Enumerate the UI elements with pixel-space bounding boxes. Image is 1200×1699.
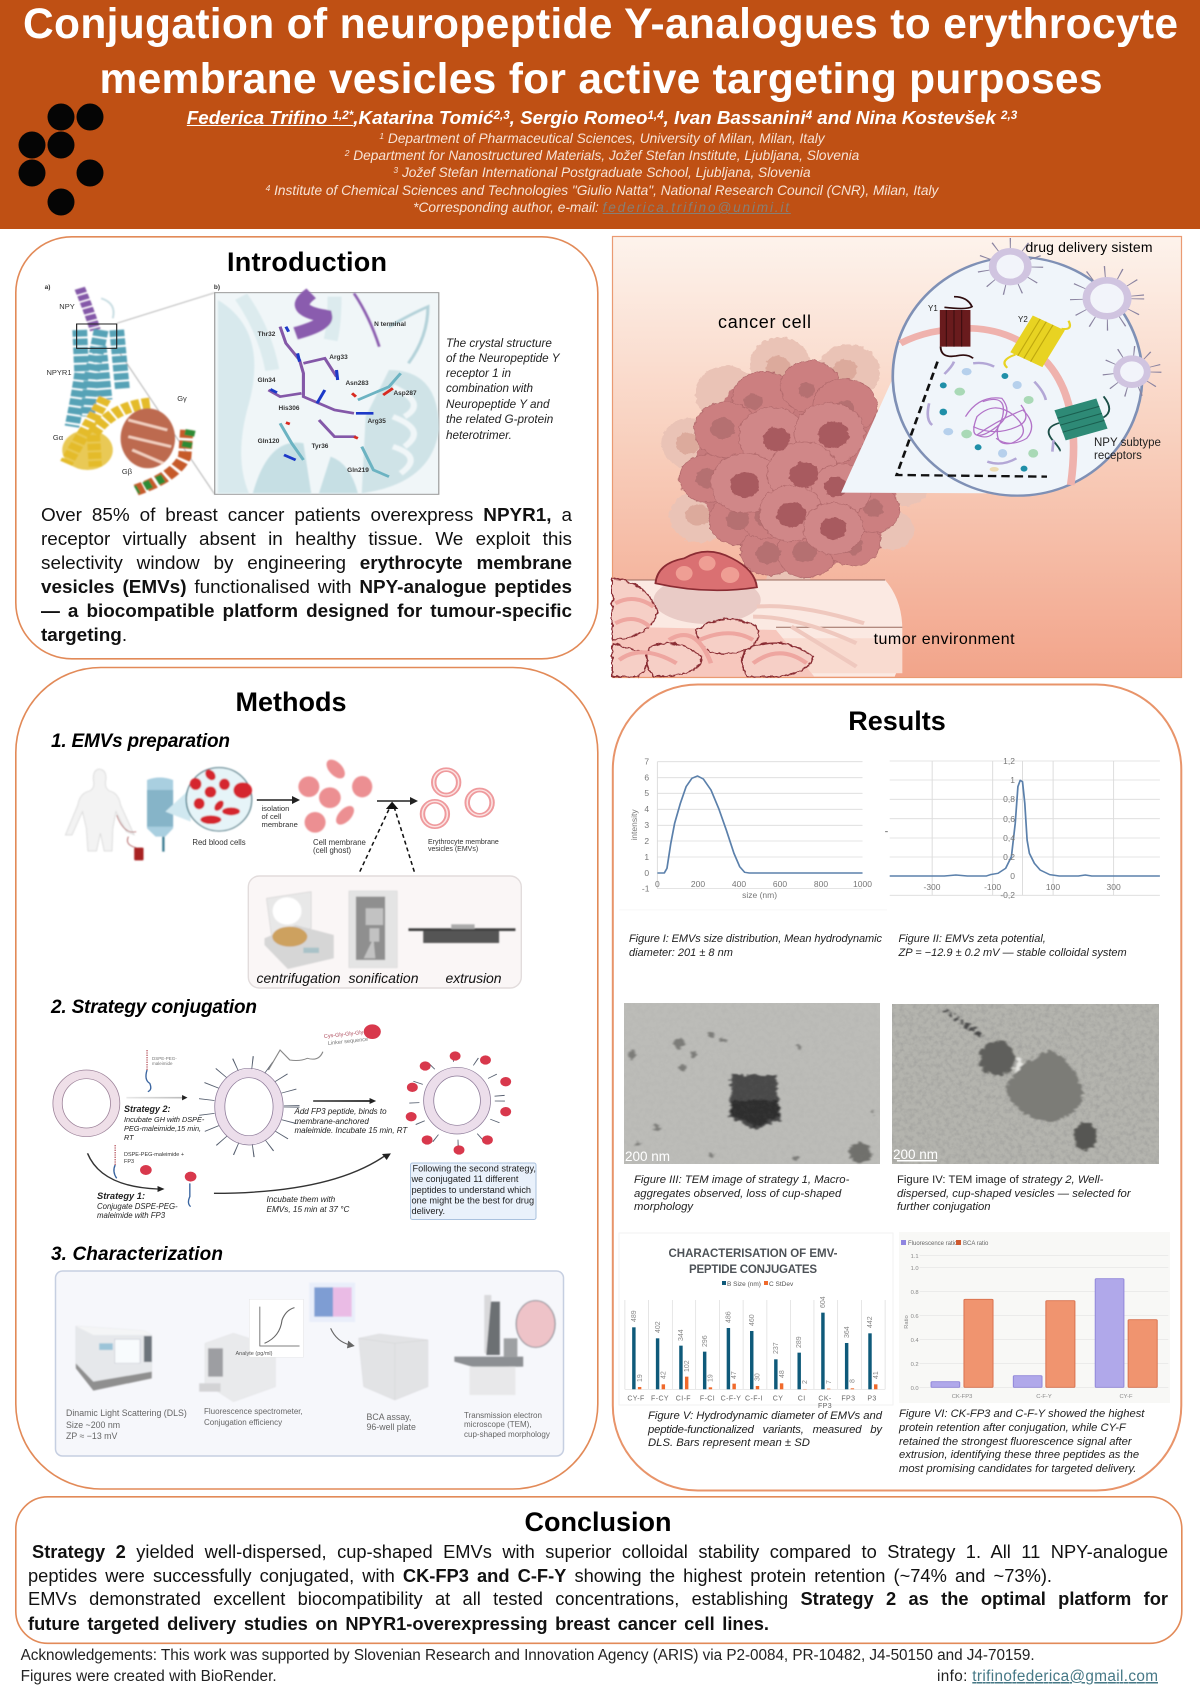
- text: DLS: ZP ≈ −13 mV: [66, 1431, 117, 1441]
- structure labels: Gln34: [257, 377, 276, 384]
- caption: figure I: Figure I: EMVs size distribution, Mean hydrodynamic: [629, 933, 882, 945]
- icon: organelles: [928, 362, 1053, 472]
- chart: hydrodynamic diameter bars: FP3: [841, 1396, 855, 1402]
- intro body text: vesicles (EMVs) functionalised with NPY-analogue peptides: [41, 577, 572, 598]
- structure labels: Asn283: [345, 380, 369, 387]
- caption: figure III: morphology: [634, 1201, 694, 1213]
- icon: maleimide-decorated EMV: [206, 1050, 323, 1151]
- acknowledgements: Figures were created with BioRender.: [21, 1668, 277, 1685]
- chart: zeta potential: 0,6: [1003, 814, 1015, 824]
- text: TEM: microscope (TEM),: [464, 1420, 532, 1429]
- chart: size distribution: 6: [644, 772, 649, 782]
- chart: size distribution: 1000: [853, 879, 872, 889]
- icon: 96-well plate: [309, 1283, 355, 1322]
- chart: size distribution: 200: [691, 879, 705, 889]
- arrow: to vesicles: [377, 797, 418, 805]
- diagram: blood donor and bag: [65, 769, 191, 860]
- icon: peptide-decorated EMV: [406, 1051, 511, 1155]
- arrows: reaction steps: [88, 1095, 391, 1193]
- authors: Federica Trifino 1,2*,Katarina Tomić2,3, Sergio Romeo1,4, Ivan Bassanini4 and Nina Kostevšek 2,3: [187, 107, 1017, 128]
- title: [23, 1, 1178, 103]
- chart: zeta potential: [885, 756, 1160, 900]
- image: TEM strategy 1: 200 nm: [625, 1149, 670, 1164]
- structure labels: b): [214, 284, 220, 291]
- caption: figure VI: most promising candidates for targeted delivery.: [899, 1463, 1136, 1475]
- caption: figure V: peptide-functionalized variants, measured by: [647, 1424, 883, 1436]
- heading: Results: Results: [848, 706, 946, 736]
- text: Strategy 1: Conjugate DSPE-PEG-: [97, 1202, 178, 1211]
- figure caption: crystal structure: Neuropeptide Y and: [446, 398, 550, 411]
- chart: hydrodynamic diameter bars: C-F-Y: [721, 1396, 741, 1402]
- chart: hydrodynamic diameter bars: 402: [655, 1321, 662, 1333]
- affiliation 1: 1 Department of Pharmaceutical Sciences, University of Milan, Milan, Italy: [379, 131, 825, 146]
- chart: hydrodynamic diameter bars: C-F-I: [745, 1396, 763, 1402]
- chart: size distribution: 0: [655, 879, 660, 889]
- chart: size distribution: -1: [642, 884, 650, 894]
- chart: fluorescence and BCA ratios: 0.0: [911, 1386, 919, 1392]
- text: DLS: Dinamic Light Scattering (DLS): [66, 1408, 187, 1418]
- figure: binding site close-up: [215, 293, 439, 494]
- chart: size distribution: 5: [644, 788, 649, 798]
- text: Strategy 1: Strategy 1:: [97, 1191, 145, 1201]
- text: EMV label: Erythrocyte membrane: [428, 839, 499, 846]
- chart: zeta potential: 1,2: [1003, 756, 1015, 766]
- chart: hydrodynamic diameter bars: CI: [798, 1396, 806, 1402]
- heading: Conclusion: Conclusion: [524, 1507, 672, 1537]
- figure caption: crystal structure: the related G-protein: [446, 413, 553, 426]
- structure labels: Gln219: [347, 467, 369, 474]
- intro body text: — a biocompatible platform designed for tumour-specific: [41, 601, 572, 622]
- title: Conjugation of neuropeptide Y-analogues to erythrocyte: [23, 1, 1178, 48]
- icon: dashed zoom triangle: [897, 362, 1047, 477]
- chart: fluorescence and BCA ratios: [899, 1232, 1170, 1403]
- figure caption: crystal structure: combination with: [446, 382, 533, 395]
- affiliation 2: 2 Department for Nanostructured Materials, Jožef Stefan Institute, Ljubljana, Slovenia: [345, 148, 859, 163]
- intro body text: [41, 505, 572, 646]
- heading: Introduction: Introduction: [227, 247, 387, 277]
- caption: figure VI: Figure VI: CK-FP3 and C-F-Y showed the highest: [899, 1408, 1145, 1420]
- chart: size distribution: 4: [644, 804, 649, 814]
- caption: figure V: DLS. Bars represent mean ± SD: [648, 1437, 810, 1449]
- chart: size distribution: 0: [644, 868, 649, 878]
- labels: receptor types: Y2: [1018, 315, 1028, 324]
- chart: zeta potential: -0,2: [1000, 890, 1015, 900]
- chart: fluorescence and BCA ratios: C-F-Y: [1036, 1394, 1052, 1400]
- image: TEM strategy 1: [624, 1003, 880, 1164]
- chart: size distribution: 1: [644, 852, 649, 862]
- text: incubate with EMVs: EMVs, 15 min at 37 °C: [266, 1205, 349, 1214]
- chart: hydrodynamic diameter bars: B Size (nm): [727, 1281, 761, 1288]
- image: TEM strategy 2: [892, 1004, 1159, 1164]
- chart: hydrodynamic diameter bars: 8: [850, 1379, 856, 1383]
- chart: hydrodynamic diameter bars: 486: [726, 1311, 732, 1323]
- caption: figure I: diameter: 201 ± 8 nm: [629, 947, 733, 959]
- contact email: info: trifinofederica@gmail.com: [937, 1668, 1158, 1685]
- caption: figure V: Figure V: Hydrodynamic diameter of EMVs and: [648, 1410, 883, 1422]
- chart: hydrodynamic diameter bars: 460: [749, 1314, 756, 1326]
- text: isolation of cell membrane: of cell: [262, 812, 282, 821]
- icon: nucleus DNA tangle: [965, 398, 1032, 444]
- text: red blood cells label: Red blood cells: [192, 838, 246, 847]
- chart: hydrodynamic diameter bars: 47: [731, 1371, 738, 1379]
- text: isolation of cell membrane: isolation: [262, 804, 289, 813]
- structure labels: Arg33: [329, 354, 348, 361]
- chart: hydrodynamic diameter bars: 237: [773, 1342, 780, 1354]
- structure labels: Gα: [53, 433, 64, 442]
- labels: receptor types: Y1: [928, 304, 938, 313]
- icon: extruder: [408, 924, 515, 943]
- icon: Y2 receptor: [1002, 307, 1072, 381]
- chart: fluorescence and BCA ratios: 0.2: [911, 1362, 919, 1368]
- chart: hydrodynamic diameter bars: CHARACTERISATION OF EMV-: [668, 1248, 838, 1260]
- structure labels: [45, 284, 417, 476]
- chart: hydrodynamic diameter bars: 296: [702, 1335, 709, 1347]
- chart: zeta potential: -300: [923, 882, 941, 892]
- callout: eleven peptides: one might be the best for drug: [412, 1196, 534, 1206]
- text: linker sequence: maleimide: [152, 1061, 173, 1066]
- chart: hydrodynamic diameter bars: FP3: [818, 1403, 832, 1410]
- chart: hydrodynamic diameter bars: 7: [826, 1380, 833, 1384]
- callout: eleven peptides: peptides to understand which: [412, 1185, 531, 1195]
- illustration: tumour cell cluster: [661, 337, 928, 603]
- chart: fluorescence and BCA ratios: BCA ratio: [963, 1241, 989, 1247]
- chart: zeta potential: 1: [1010, 775, 1015, 785]
- conclusion body text: future targeted delivery studies on NPYR1-overexpressing breast cancer cell lines.: [28, 1613, 769, 1634]
- conclusion body text: Strategy 2 yielded well-dispersed, cup-shaped EMVs with superior colloidal stability compared to Strategy 1. All 11 NPY-analogue: [32, 1541, 1168, 1562]
- heading: Methods: Methods: [236, 687, 346, 717]
- chart: zeta potential: 300: [1107, 882, 1121, 892]
- figure caption: crystal structure: The crystal structure: [446, 337, 552, 350]
- labels: techniques: sonification: [348, 970, 419, 986]
- structure labels: NPYR1: [46, 368, 72, 377]
- icon: Y1 receptor: [940, 297, 973, 358]
- icon: BCA plate reader: [359, 1334, 428, 1400]
- text: Strategy 2: Strategy 2:: [124, 1104, 171, 1114]
- conclusion body text: [28, 1541, 1168, 1634]
- chart: hydrodynamic diameter bars: CK-: [818, 1396, 832, 1402]
- chart: hydrodynamic diameter bars: 19: [708, 1374, 714, 1382]
- label: drug delivery system: drug delivery sistem: [1026, 239, 1152, 255]
- chart: zeta potential: 0: [1010, 871, 1015, 881]
- structure labels: Gβ: [122, 467, 133, 476]
- acknowledgements: [20, 1647, 1158, 1685]
- panel: introduction: [15, 236, 599, 660]
- text: BCA: BCA assay,: [366, 1412, 411, 1422]
- arrow: dashed from process box: [360, 802, 414, 872]
- callout: eleven peptides: we conjugated 11 different: [410, 1174, 519, 1184]
- caption: figure IV: further conjugation: [897, 1201, 991, 1213]
- intro body text: targeting.: [41, 625, 127, 646]
- icon: selection box: [77, 324, 117, 348]
- conclusion body text: peptides were successfully conjugated, with CK-FP3 and C-F-Y showing the highest protein retention (~74% and ~73%).: [28, 1565, 1052, 1586]
- chart: fluorescence and BCA ratios: 0.4: [911, 1338, 919, 1344]
- text: fluorescence: Fluorescence spectrometer,: [204, 1407, 303, 1416]
- label: tumor environment: tumor environment: [874, 631, 1015, 648]
- title: membrane vesicles for active targeting purposes: [100, 56, 1102, 103]
- chart: fluorescence and BCA ratios: 1.1: [911, 1254, 919, 1260]
- chart: hydrodynamic diameter bars: F-CI: [700, 1396, 715, 1402]
- chart: hydrodynamic diameter bars: 102: [684, 1360, 691, 1372]
- label: NPY subtype receptors: receptors: [1094, 450, 1142, 462]
- figure caption: crystal structure: receptor 1 in: [446, 367, 511, 380]
- chart: hydrodynamic diameter bars: 48: [779, 1370, 786, 1378]
- subheading: EMVs preparation: 1. EMVs preparation: [51, 731, 230, 752]
- figure caption: crystal structure: heterotrimer.: [446, 429, 512, 442]
- labels: techniques: centrifugation: [256, 970, 341, 986]
- chart: hydrodynamic diameter bars: 42: [660, 1371, 668, 1379]
- chart: zeta potential: -100: [984, 882, 1001, 892]
- chart: size distribution: [619, 756, 887, 910]
- label: NPY subtype receptors: NPY subtype: [1094, 437, 1161, 449]
- affiliation 4: 4 Institute of Chemical Sciences and Technologies "Giulio Natta", National Research Council (CNR), Milan, Italy: [266, 183, 938, 198]
- text: cell membrane label: Cell membrane: [313, 838, 366, 847]
- chart: fluorescence and BCA ratios: Fluorescence ratio: [908, 1241, 958, 1247]
- panel: conclusion: [15, 1496, 1183, 1644]
- chart: zeta potential: 0,2: [1003, 852, 1015, 862]
- icon: TEM microscope: [454, 1295, 555, 1395]
- caption: figure III: aggregates observed, loss of cup-shaped: [634, 1188, 842, 1200]
- conclusion body text: EMVs demonstrated excellent biocompatibility at all tested concentrations, establishing Strategy 2 as the optimal platform for: [28, 1588, 1168, 1609]
- labels: techniques: [256, 970, 502, 986]
- chart: fluorescence and BCA ratios: CK-FP3: [952, 1394, 972, 1400]
- text: add FP3 step: membrane-anchored: [294, 1117, 369, 1126]
- structure labels: Gγ: [177, 394, 187, 403]
- text: isolation of cell membrane: membrane: [262, 820, 298, 829]
- chart: hydrodynamic diameter bars: 30: [754, 1373, 762, 1381]
- chart: size distribution: size (nm): [742, 890, 777, 900]
- chart: size distribution: 3: [644, 820, 649, 830]
- figure caption: crystal structure: of the Neuropeptide Y: [446, 352, 561, 365]
- text: add FP3 step: maleimide. Incubate 15 min, RT: [294, 1126, 408, 1135]
- icon: NPY subtype receptor: [1041, 396, 1119, 452]
- chart: fluorescence and BCA ratios: CY-F: [1120, 1394, 1133, 1400]
- text: EMV label: vesicles (EMVs): [428, 846, 478, 853]
- caption: figure VI: retained the strongest fluorescence signal after: [899, 1436, 1133, 1448]
- chart: size distribution: intensity: [629, 809, 639, 841]
- chart: fluorescence and BCA ratios: Ratio: [904, 1315, 910, 1329]
- header banner: [0, 0, 1200, 229]
- icon: drug delivery vesicles: [983, 243, 1156, 392]
- structure labels: NPY: [59, 302, 75, 311]
- arrow: isolation step: [257, 796, 300, 804]
- panel: results: [612, 684, 1182, 1492]
- text: DSPE mix: DSPE-PEG-maleimide +: [124, 1152, 184, 1158]
- callout: eleven peptides: delivery.: [412, 1206, 445, 1216]
- caption: figure IV: Figure IV: TEM image of strategy 2, Well-: [897, 1174, 1103, 1186]
- chart: hydrodynamic diameter bars: 2: [802, 1380, 809, 1384]
- acknowledgements: Acknowledgements: This work was supported by Slovenian Research and Innovation Agency (ARIS) via P2-0084, PR-10482, J4-50150 and J4-70159.: [21, 1647, 1035, 1664]
- callout: eleven peptides: [410, 1163, 536, 1220]
- text: axis: Analyte (pg/ml): [236, 1351, 273, 1357]
- diagram: EMV rings: [422, 770, 492, 827]
- chart: zeta potential: 0,4: [1003, 833, 1015, 843]
- labels: receptor types: [928, 304, 1028, 324]
- illustration: zoom callout with cell membrane and receptors: [841, 243, 1156, 496]
- structure labels: His306: [279, 405, 300, 412]
- callout: eleven peptides: Following the second strategy,: [412, 1164, 536, 1174]
- structure labels: Gln120: [258, 438, 280, 445]
- chart: hydrodynamic diameter bars: CI-F: [676, 1396, 691, 1402]
- diagram: red blood cells magnified: [186, 768, 252, 831]
- chart: hydrodynamic diameter bars: 364: [844, 1326, 851, 1338]
- caption: figure V: [647, 1410, 883, 1449]
- caption: figure IV: dispersed, cup-shaped vesicles — selected for: [897, 1188, 1132, 1200]
- chart: hydrodynamic diameter bars: P3: [867, 1396, 877, 1402]
- arrow: plate to reader: [331, 1328, 355, 1348]
- corresponding author: *Corresponding author, e-mail: federica.trifino@unimi.it: [413, 200, 791, 215]
- diagram: cell ghosts: [298, 757, 372, 833]
- icon: DLS instrument: [76, 1326, 152, 1391]
- text: linker sequence: DSPE-PEG-: [152, 1056, 177, 1061]
- icon: university logo dots: [18, 104, 104, 216]
- box: EMV preparation techniques: [248, 876, 521, 988]
- chart: hydrodynamic diameter bars: F-CY: [651, 1396, 669, 1402]
- chart: hydrodynamic diameter bars: [619, 1233, 893, 1410]
- icon: sonicator: [349, 891, 397, 968]
- chart: hydrodynamic diameter bars: 442: [867, 1316, 874, 1328]
- subheading: Characterization: 3. Characterization: [51, 1244, 223, 1265]
- caption: figure III: Figure III: TEM image of strategy 1, Macro-: [634, 1174, 850, 1186]
- chart: zeta potential: 0,8: [1003, 794, 1015, 804]
- icon: cell membrane arc: [900, 328, 1074, 485]
- chart: hydrodynamic diameter bars: 344: [678, 1329, 685, 1341]
- caption: figure VI: protein retention after conjugation, while CY-F: [898, 1422, 1127, 1434]
- chart: hydrodynamic diameter bars: 41: [873, 1371, 880, 1379]
- icon: bare EMV ring: [53, 1070, 120, 1137]
- text: cell membrane label: (cell ghost): [313, 846, 352, 855]
- subheading: Strategy conjugation: 2. Strategy conjugation: [50, 997, 257, 1018]
- chart: fluorescence and BCA ratios: 0.8: [911, 1290, 919, 1296]
- text: add FP3 step: Add FP3 peptide, binds to: [294, 1107, 387, 1116]
- icon: centrifuge: [265, 892, 334, 969]
- text: DLS: Size ~200 nm: [66, 1420, 120, 1430]
- text: DSPE mix: FP3: [124, 1159, 134, 1165]
- text: Strategy 1: maleimide with FP3: [97, 1211, 166, 1220]
- intro body text: receptor virtually absent in healthy tissue. We exploit this: [41, 529, 572, 550]
- chart: hydrodynamic diameter bars: C StDev: [769, 1281, 794, 1288]
- icon: free peptide and linker squiggles: [114, 1024, 381, 1207]
- illustration: tumour environment tissue: [612, 552, 902, 677]
- chart: size distribution: 600: [773, 879, 787, 889]
- structure labels: a): [45, 284, 50, 291]
- text: fluorescence: Conjugation efficiency: [204, 1418, 282, 1427]
- text: TEM: cup-shaped morphology: [464, 1430, 550, 1439]
- chart: hydrodynamic diameter bars: 19: [637, 1374, 644, 1382]
- structure labels: Tyr36: [312, 443, 329, 450]
- chart: size distribution: 400: [732, 879, 746, 889]
- label: cancer cell: cancer cell: [718, 312, 811, 332]
- chart: hydrodynamic diameter bars: 289: [796, 1336, 803, 1348]
- image: TEM strategy 2: 200 nm: [893, 1147, 938, 1162]
- chart: zeta potential: 100: [1046, 882, 1060, 892]
- text: Strategy 2: PEG-maleimide,15 min,: [124, 1124, 201, 1133]
- structure labels: N terminal: [374, 321, 406, 328]
- labels: techniques: extrusion: [446, 970, 502, 986]
- icon: fluorescence spectrometer: [199, 1333, 275, 1402]
- diagram: conjugation scheme: [53, 1024, 536, 1220]
- structure labels: Asp287: [393, 390, 417, 397]
- text: Strategy 2: Incubate GH with DSPE-: [124, 1115, 205, 1124]
- chart: fluorescence and BCA ratios: 1.0: [911, 1266, 919, 1272]
- icon: absorbance chart: [249, 1299, 303, 1357]
- structure labels: Thr32: [258, 331, 276, 338]
- panel: cancer cell illustration: [610, 236, 1182, 678]
- text: Strategy 2: RT: [124, 1133, 134, 1142]
- chart: hydrodynamic diameter bars: 489: [631, 1310, 638, 1322]
- text: linker sequence: [152, 1030, 368, 1066]
- text: incubate with EMVs: Incubate them with: [266, 1195, 336, 1204]
- affiliation 3: 3 Jožef Stefan International Postgraduate School, Ljubljana, Slovenia: [393, 165, 811, 180]
- text: linker sequence: Cys-Gly-Gly-Gly-: [324, 1030, 366, 1040]
- chart: size distribution: 7: [644, 756, 649, 766]
- caption: figure II: Figure II: EMVs zeta potential,: [898, 933, 1046, 945]
- chart: hydrodynamic diameter bars: CY-F: [627, 1396, 645, 1402]
- figure: NPYR1 overall structure: [62, 288, 215, 494]
- text: BCA: 96-well plate: [366, 1422, 416, 1432]
- chart: hydrodynamic diameter bars: CY: [773, 1396, 783, 1402]
- chart: fluorescence and BCA ratios: 0.6: [911, 1314, 919, 1320]
- panel: methods: [15, 666, 599, 1490]
- box: characterization instruments: [56, 1271, 564, 1456]
- chart: size distribution: 2: [644, 836, 649, 846]
- text: linker sequence: Linker sequence: [328, 1037, 368, 1047]
- intro body text: selectivity window by engineering erythrocyte membrane: [41, 553, 572, 574]
- chart: hydrodynamic diameter bars: PEPTIDE CONJUGATES: [689, 1264, 817, 1276]
- chart: size distribution: 800: [814, 879, 828, 889]
- structure labels: Arg35: [367, 418, 386, 425]
- intro body text: Over 85% of breast cancer patients overexpress NPYR1, a: [41, 505, 572, 526]
- caption: figure II: ZP = −12.9 ± 0.2 mV — stable colloidal system: [898, 947, 1127, 959]
- chart: hydrodynamic diameter bars: 604: [820, 1296, 827, 1308]
- text: TEM: Transmission electron: [464, 1411, 542, 1420]
- caption: figure VI: extrusion, identifying these three peptides as the: [899, 1449, 1139, 1461]
